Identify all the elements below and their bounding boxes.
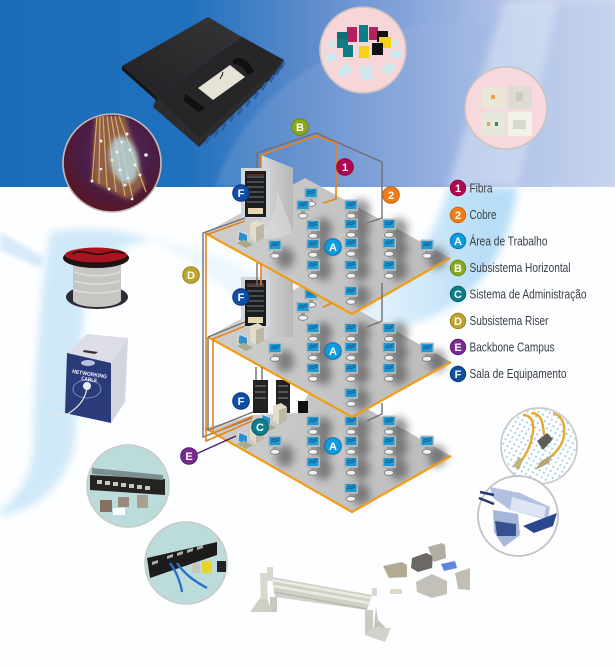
badge: 2 copper: 2 (388, 190, 394, 202)
fibre cable runs (orange) (206, 136, 336, 441)
badge: 1 fibre (337, 159, 353, 175)
floor edge (208, 337, 451, 417)
photo: fibre patch panel (122, 17, 284, 147)
badge: 2 copper (383, 187, 399, 203)
badge: C administration (252, 419, 268, 435)
legend: Cobre (450, 207, 497, 223)
legend: Subsistema Riser: D (454, 316, 462, 328)
badge: A floor 3: A (329, 441, 337, 453)
box label: CABLE (81, 376, 98, 385)
badge: F floor 3: F (238, 396, 245, 408)
badge: D riser (183, 267, 199, 283)
badge: A floor 1: A (329, 242, 337, 254)
floor plate (205, 380, 451, 512)
badge: F floor 2 (233, 289, 249, 305)
monitor shadows (276, 322, 446, 410)
legend: Cobre: Cobre (470, 208, 497, 222)
partition wall (261, 155, 293, 236)
legend: Área de Trabalho: A (454, 236, 462, 248)
photo: networking cable box (56, 334, 128, 423)
badge: F floor 1: F (238, 188, 245, 200)
photo: optical fibre bundle (63, 114, 161, 212)
background: pale blue swooshes (0, 187, 518, 516)
legend: Subsistema Riser (450, 313, 548, 329)
legend: Cobre: 2 (455, 210, 461, 222)
photo: shielded keystones (383, 543, 470, 598)
legend: Subsistema Riser: Subsistema Riser (470, 314, 548, 328)
badge: E backbone (181, 448, 197, 464)
legend: Sala de Equipamento: F (455, 369, 462, 381)
background: blue sky band (0, 0, 615, 187)
floor plate (208, 282, 451, 417)
monitor shadows (276, 199, 446, 307)
legend: Subsistema Horizontal: B (454, 263, 462, 275)
badge: F floor 1 (233, 185, 249, 201)
legend: Área de Trabalho (450, 233, 548, 249)
photo: wall plates (465, 67, 547, 149)
badge: A floor 3 (325, 438, 341, 454)
workspace monitors (268, 188, 434, 304)
floor plate (205, 178, 450, 314)
legend: Backbone Campus (450, 339, 554, 355)
photo: cable reel (63, 248, 129, 309)
floor 2: middle storey (208, 259, 451, 417)
badge: E backbone: E (185, 451, 193, 463)
badge: C administration: C (256, 422, 264, 434)
legend: Subsistema Horizontal: Subsistema Horizontal (470, 261, 570, 275)
floor edge (205, 428, 451, 512)
partition wall (261, 259, 293, 340)
workspace monitors (268, 416, 434, 501)
legend: Sistema de Administração (450, 286, 587, 302)
backbone campus link (196, 436, 236, 454)
legend: Backbone Campus: E (454, 342, 462, 354)
photo: patch panel with blue cables (145, 522, 227, 604)
equipment rack (241, 168, 270, 218)
legend: Fibra: Fibra (470, 182, 493, 196)
legend: Sala de Equipamento (450, 366, 567, 382)
equipment racks (253, 380, 308, 413)
badge: B horizontal: B (296, 122, 304, 134)
legend: Sistema de Administração: C (454, 289, 462, 301)
floor 1: top storey (205, 155, 450, 314)
badge: F floor 3 (233, 393, 249, 409)
floor edge (205, 233, 450, 314)
workstation (237, 323, 264, 351)
photo: 110 punch-down bracket (250, 567, 391, 642)
legend: Fibra (450, 180, 493, 196)
photo: yellow patch cords (501, 408, 577, 484)
legend: Sistema de Administração: Sistema de Administração (470, 288, 587, 302)
monitor shadows (276, 417, 446, 505)
badge: D riser: D (187, 270, 195, 282)
box label: NETWORKING (72, 369, 107, 380)
badge: A floor 2 (325, 343, 341, 359)
photo: coloured keystone jacks (320, 7, 406, 93)
legend: Fibra: 1 (455, 183, 461, 195)
equipment rack (241, 277, 270, 327)
legend: Subsistema Horizontal (450, 260, 570, 276)
workstation (237, 220, 264, 248)
legend: Área de Trabalho: Área de Trabalho (470, 234, 548, 248)
badge: A floor 1 (325, 239, 341, 255)
legend (450, 180, 587, 382)
copper cable runs (grey) (203, 133, 382, 437)
legend: Backbone Campus: Backbone Campus (470, 340, 554, 354)
badge: F floor 2: F (238, 292, 245, 304)
workspace monitors (268, 288, 434, 406)
workstations (237, 403, 287, 449)
badge: A floor 2: A (329, 346, 337, 358)
floor 3: ground storey (205, 380, 451, 512)
photo: RJ45 plugs (478, 476, 558, 556)
legend: Sala de Equipamento: Sala de Equipamento (470, 367, 567, 381)
photo: patch panel with keystones (87, 445, 169, 527)
badge: B horizontal (292, 119, 308, 135)
badge: 1 fibre: 1 (342, 162, 348, 174)
